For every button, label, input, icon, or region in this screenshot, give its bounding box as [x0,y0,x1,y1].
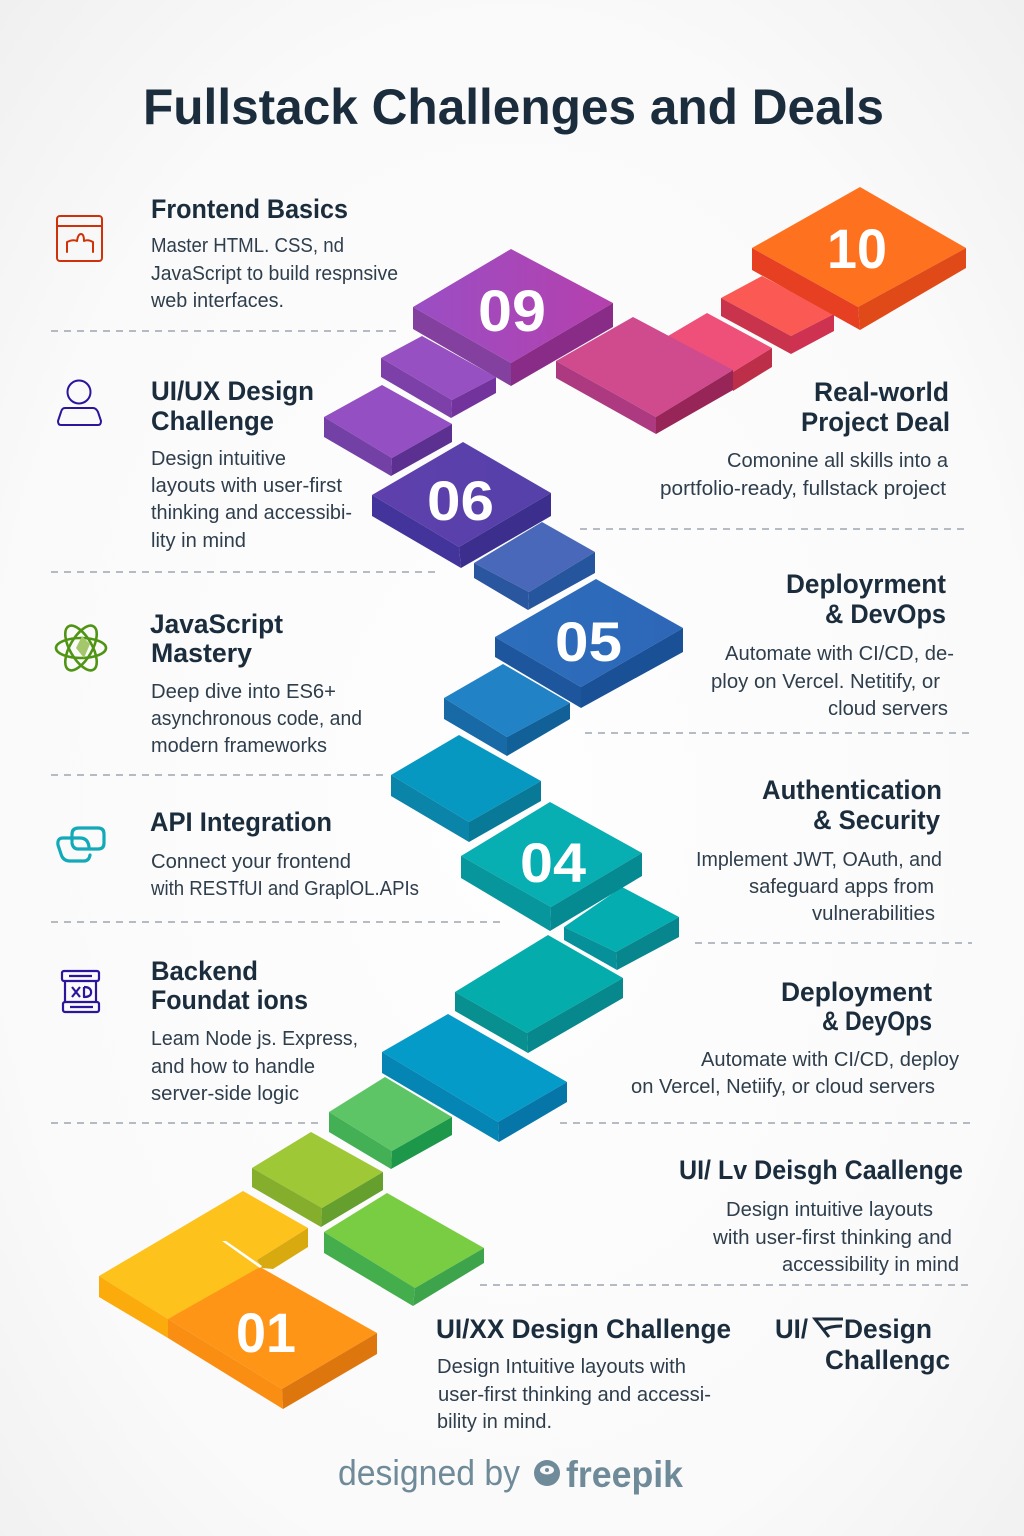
text block: Real-world Project Deal [660,377,950,500]
text block: Deployment and DevOps upper: & DevOps [825,599,946,629]
divider lines [51,331,972,1285]
icon: atom [56,621,106,675]
text block: UI/UX Design Challenge [151,376,352,552]
tile: magenta large [556,317,733,434]
text block: Real-world Project Deal: Comonine all skills into a [727,450,949,472]
tile: 04 [461,802,642,931]
text block: Frontend Basics: web interfaces. [150,290,284,312]
text block: Real-world Project Deal: portfolio-ready, fullstack project [660,478,946,500]
tile: green [329,1077,452,1169]
tile: blue lower connector [444,664,570,756]
text block: UI/XX Design Challenge: user-first thinking and accessi- [438,1384,711,1406]
text block: Real-world Project Deal: Project Deal [801,407,950,437]
tile: teal small [564,887,679,970]
text block: UI/UX Design Challenge: Design intuitive [151,448,286,470]
text block: API Integration: API Integration [150,807,332,837]
tile: 01 [168,1267,377,1409]
text block: API Integration: Connect your frontend [151,851,351,873]
text block: JavaScript Mastery: Deep dive into ES6+ [151,681,336,703]
tile: yellow-green [252,1132,383,1227]
footer: designed by freepik [338,1452,683,1495]
text block: Backend Foundations: Backend [151,956,258,986]
text block: UI/UX Design Challenge: lity in mind [151,530,246,552]
text block: UI/Lv Deisgh Caallenge: accessibility in mind [782,1254,959,1276]
text block: Deployment and DevOps upper: ploy on Vercel. Netitify, or [711,671,940,693]
tile: blue long [382,1014,567,1142]
text block: Frontend Basics: Master HTML. CSS, nd [151,235,344,257]
text block: Deployment and DeyOps lower [631,977,959,1098]
tile: teal large [455,935,623,1053]
tile: light green [324,1193,484,1306]
number 01: 01 [236,1301,296,1364]
tile: purple mid [324,385,452,476]
text block: Authentication and Security: vulnerabilities [812,903,935,925]
text block: Backend Foundations: Leam Node js. Express, [151,1028,358,1050]
text block: UI/ Design Challengc: Design [844,1314,932,1344]
text block: Deployment and DevOps upper: Deployrment [786,569,946,599]
text block: Backend Foundations: Foundat ions [151,985,308,1015]
text block: UI/Lv Deisgh Caallenge: UI/ Lv Deisgh Caallenge [679,1155,963,1185]
icon: link [58,828,104,861]
text block: JavaScript Mastery [150,609,362,757]
text block: UI/Lv Deisgh Caallenge: Design intuitive layouts [726,1199,933,1221]
text block: UI/XX Design Challenge: Design Intuitive layouts with [437,1356,686,1378]
icon: user [58,380,101,425]
tile: 10 [752,187,966,330]
text block: UI/ Design Challengc: Challengc [825,1345,950,1375]
text block: UI/UX Design Challenge: Challenge [151,406,274,436]
text block: JavaScript Mastery: Mastery [151,638,252,668]
tile: pink connector [668,313,772,391]
tile: red small [721,276,834,354]
text block: JavaScript Mastery: modern frameworks [151,735,327,757]
text block: Deployment and DeyOps lower: on Vercel, Netiify, or cloud servers [631,1076,935,1098]
text block: UI/XX Design Challenge: UI/XX Design Challenge [436,1314,731,1344]
text block: UI/UX Design Challenge: layouts with user-first [151,475,342,497]
icon: scroll XD [62,971,99,1012]
text block: Deployment and DeyOps lower: Deployment [781,977,932,1007]
text block: UI/Lv Deisgh Caallenge: with user-first thinking and [712,1227,952,1249]
highlight crack on yellow tile [222,1241,262,1268]
text block: Deployment and DevOps upper [711,569,954,720]
tile: purple small upper [381,336,496,418]
icon: browser window [57,216,102,261]
footer: designed by freepik: designed by [338,1452,520,1493]
text block: Backend Foundations: and how to handle [151,1056,315,1078]
text block: UI/UX Design Challenge: thinking and accessibi- [151,502,352,524]
title: Fullstack Challenges and Deals [143,79,884,135]
text block: UI/UX Design Challenge: UI/UX Design [151,376,314,406]
text block: Authentication and Security: Implement JWT, OAuth, and [696,849,942,871]
icon: freepik logo [534,1460,560,1486]
tile: blue connector [474,522,595,610]
text block: UI/ Design Challengc [775,1314,950,1375]
text block: Authentication and Security: & Security [813,805,940,835]
text block: Backend Foundations [151,956,358,1105]
staircase of isometric tiles [99,187,966,1409]
tile: yellow [99,1191,308,1338]
text block: UI/XX Design Challenge [436,1314,731,1433]
number 10: 10 [827,217,887,280]
text block: Real-world Project Deal: Real-world [814,377,949,407]
text block: Deployment and DeyOps lower: & DeyOps [822,1006,932,1036]
number 04: 04 [520,831,586,894]
text block: UI/XX Design Challenge: bility in mind. [437,1411,552,1433]
text block: Frontend Basics: JavaScript to build respnsive [151,263,398,285]
text block: API Integration: with RESTfUI and GraplOL.APIs [150,878,419,900]
text block: Authentication and Security [696,775,942,925]
text block: Frontend Basics: Frontend Basics [151,194,348,224]
number 06: 06 [427,469,494,532]
text block: JavaScript Mastery: asynchronous code, and [151,708,362,730]
text block: Deployment and DevOps upper: Automate with CI/CD, de- [725,643,954,665]
text block: UI/Lv Deisgh Caallenge [679,1155,963,1276]
text block: Authentication and Security: Authentication [762,775,942,805]
tile: 05 [495,579,683,708]
text block: Frontend Basics [150,194,398,312]
text block: JavaScript Mastery: JavaScript [150,609,283,639]
number 05: 05 [555,610,622,673]
text block: Authentication and Security: safeguard apps from [749,876,934,898]
text block: Deployment and DeyOps lower: Automate with CI/CD, deploy [701,1049,959,1071]
number 09: 09 [478,279,546,344]
tile: teal-blue [391,735,541,842]
footer: designed by freepik: freepik [566,1454,683,1495]
text block: UI/ Design Challengc: UI/ [775,1314,808,1344]
text block: Backend Foundations: server-side logic [151,1083,299,1105]
tile: 09 [413,249,613,386]
text block: Deployment and DevOps upper: cloud servers [828,698,948,720]
text block: API Integration [150,807,419,900]
tile: 06 [372,442,551,568]
